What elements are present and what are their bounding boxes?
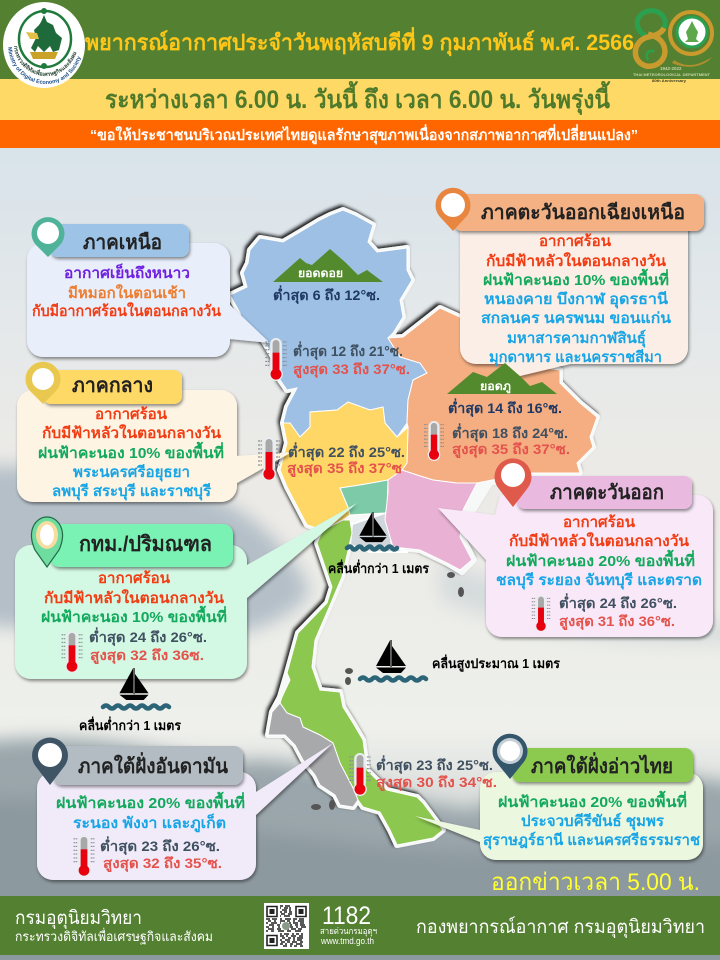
advisory band: “ขอให้ประชาชนบริเวณประเทศไทยดูแลรักษาสุขภาพเนื่องจากสภาพอากาศที่เปลี่ยนแปลง” — [90, 124, 638, 145]
forecast text: มุกดาหาร และนครราชสีมา — [489, 349, 662, 367]
logo: 80th anniversary — [633, 11, 712, 83]
forecast text: ฝนฟ้าคะนอง 10% ของพื้นที่ — [41, 605, 227, 626]
subtitle band — [0, 79, 720, 120]
mountain: doi peak with temperature: ยอดดอย — [298, 268, 343, 280]
south temperature: สูงสุด 30 ถึง 34°ซ. — [376, 774, 497, 791]
footer: hotline: 1182 — [322, 902, 371, 930]
digit 0 — [670, 12, 712, 54]
north temperature: สูงสุด 33 ถึง 37°ซ. — [293, 361, 410, 378]
pin — [492, 734, 528, 779]
central temperature: ต่ำสุด 22 ถึง 25°ซ. — [288, 442, 405, 461]
map: southern gulf coast — [280, 520, 443, 845]
mountain: phu peak with temperature: ยอดภู — [480, 381, 511, 394]
footer: hotline: สายด่วนกรมอุตุฯ — [320, 926, 377, 937]
header pill — [453, 194, 704, 231]
forecast text: มีหมอกในตอนเช้า — [68, 284, 186, 302]
heading: กทม./ปริมณฑล — [79, 533, 212, 556]
icon: thermometer — [424, 421, 444, 461]
forecast text: กับมีฟ้าหลัวในตอนกลางวัน — [44, 589, 225, 607]
footer: hotline: www.tmd.go.th — [320, 936, 374, 946]
forecast text: กับมีอากาศร้อนในตอนกลางวัน — [32, 302, 222, 320]
forecast text: ระนอง พังงา และภูเก็ต — [73, 813, 226, 833]
forecast text: อากาศร้อน — [539, 233, 612, 250]
callout body — [415, 772, 703, 860]
callout body — [17, 390, 292, 502]
temperature: ต่ำสุด 23 ถึง 26°ซ. — [100, 836, 220, 855]
forecast text — [481, 233, 672, 367]
forecast text: ฝนฟ้าคะนอง 20% ของพื้นที่ — [506, 549, 695, 570]
forecast text — [41, 570, 227, 626]
forecast text: อากาศร้อน — [95, 406, 168, 423]
temperature: สูงสุด 31 ถึง 36°ซ. — [559, 613, 675, 630]
callout body — [15, 503, 357, 679]
panel: east — [438, 458, 713, 637]
map: central region — [280, 402, 408, 530]
icon: boat, andaman upper: คลื่นต่ำกว่า 1 เมตร — [79, 716, 181, 733]
temperature: ต่ำสุด 24 ถึง 26°ซ. — [89, 627, 207, 646]
central temperature: สูงสุด 35 ถึง 37°ซ — [287, 460, 403, 477]
mountain: phu peak with temperature — [447, 363, 562, 417]
south temperature — [349, 753, 497, 796]
temperature — [532, 593, 677, 632]
forecast text: ประจวบคีรีขันธ์ ชุมพร — [521, 812, 665, 831]
forecast text: ลพบุรี สระบุรี และราชบุรี — [52, 483, 212, 501]
mountain: phu peak with temperature: ต่ำสุด 14 ถึง 16°ซ. — [448, 398, 562, 417]
temperature: สูงสุด 32 ถึง 36ซ. — [90, 647, 204, 664]
logo: 80th anniversary: 80th Anniversary — [652, 78, 687, 83]
pin — [32, 517, 62, 567]
forecast text: ฝนฟ้าคะนอง 10% ของพื้นที่ — [483, 268, 669, 289]
logo: 80th anniversary: THAI METEOROLOGICAL DEPARTMENT — [633, 72, 711, 77]
panel: bangkok and vicinity — [15, 503, 357, 679]
temperature: ต่ำสุด 24 ถึง 26°ซ. — [559, 593, 677, 612]
pin — [436, 188, 471, 231]
icon: boat, andaman upper — [79, 668, 181, 733]
north temperature: ต่ำสุด 12 ถึง 21°ซ. — [293, 341, 403, 360]
forecast text: ฝนฟ้าคะนอง 20% ของพื้นที่ — [498, 790, 687, 811]
callout body — [37, 743, 333, 880]
icon: boat, lower gulf: คลื่นสูงประมาณ 1 เมตร — [432, 654, 560, 672]
panel: south andaman — [32, 738, 333, 880]
header band — [0, 0, 720, 79]
forecast text: กับมีฟ้าหลัวในตอนกลางวัน — [509, 532, 690, 550]
header pill — [50, 524, 233, 567]
forecast text: อากาศเย็นถึงหนาว — [64, 263, 190, 282]
pin — [494, 458, 532, 507]
footer: department name: กรมอุตุนิยมวิทยา — [15, 908, 142, 930]
heading: ภาคเหนือ — [83, 231, 162, 254]
heading: ภาคตะวันออกเฉียงเหนือ — [481, 201, 685, 224]
icon: boat, upper gulf: คลื่นต่ำกว่า 1 เมตร — [328, 559, 429, 576]
panel: north-east — [436, 188, 704, 376]
forecast text — [496, 514, 702, 590]
map: Bangkok and vicinity — [340, 480, 389, 515]
forecast text: ชลบุรี ระยอง จันทบุรี และตราด — [496, 572, 702, 590]
south temperature: ต่ำสุด 23 ถึง 25°ซ. — [376, 755, 493, 774]
footer: hotline — [320, 902, 377, 946]
forecast text — [38, 406, 224, 501]
footer: division name: กองพยากรณ์อากาศ กรมอุตุนิยมวิทยา — [416, 916, 705, 939]
forecast text — [483, 790, 700, 850]
central temperature — [258, 437, 405, 481]
forecast text: กับมีฟ้าหลัวในตอนกลางวัน — [486, 252, 667, 270]
mountain: doi peak with temperature — [273, 249, 383, 304]
map of Thailand — [230, 210, 597, 845]
forecast text — [56, 791, 245, 833]
forecast text: สุราษฎร์ธานี และนครศรีธรรมราช — [483, 831, 700, 850]
logo: ministry seal: Ministry of Digital Economy and Society — [8, 47, 81, 84]
callout body — [460, 225, 688, 376]
north-east temperature: ต่ำสุด 18 ถึง 24°ซ. — [452, 423, 568, 442]
temperature — [74, 835, 222, 877]
issue time: ออกข่าวเวลา 5.00 น. — [491, 869, 700, 896]
forecast text: หนองคาย บึงกาฬ อุดรธานี — [484, 290, 669, 309]
map: northern region — [230, 210, 427, 437]
map: outer white halo — [230, 210, 597, 845]
map: small islands — [311, 572, 464, 810]
icon: boat, upper gulf — [328, 512, 429, 576]
forecast text: สกลนคร นครพนม ขอนแก่น — [481, 310, 672, 327]
footer: QR code — [264, 903, 309, 949]
logo: ministry seal: กระทรวงดิจิทัลเพื่อเศรษฐกิจและสังคม — [14, 46, 76, 76]
icon: thermometer — [349, 753, 371, 796]
temperature: สูงสุด 32 ถึง 35°ซ. — [103, 855, 222, 872]
north temperature — [265, 338, 410, 381]
forecast text: มหาสารคามกาฬสินธุ์ — [507, 329, 646, 348]
map: southern andaman coast — [268, 703, 358, 807]
map: north-eastern region — [388, 308, 597, 483]
icon: boat, lower gulf — [360, 640, 560, 680]
heading: ภาคใต้ฝั่งอันดามัน — [78, 751, 228, 778]
advisory band — [0, 120, 720, 148]
map: eastern region — [385, 470, 477, 570]
panel: south gulf — [415, 734, 703, 860]
forecast text: อากาศร้อน — [563, 514, 636, 531]
forecast text: ฝนฟ้าคะนอง 20% ของพื้นที่ — [56, 791, 245, 812]
panel: central — [17, 362, 292, 502]
logo: ministry seal — [3, 2, 85, 88]
footer: department name: กระทรวงดิจิทัลเพื่อเศรษฐกิจและสังคม — [15, 928, 213, 945]
mountain: doi peak with temperature: ต่ำสุด 6 ถึง 12°ซ. — [273, 285, 380, 304]
pin — [25, 362, 60, 404]
forecast text: ฝนฟ้าคะนอง 10% ของพื้นที่ — [38, 441, 224, 462]
header pill — [50, 224, 189, 257]
header pill — [43, 370, 182, 404]
icon: thermometer — [265, 338, 287, 381]
pin — [32, 738, 68, 785]
forecast text: กับมีฟ้าหลัวในตอนกลางวัน — [42, 424, 222, 442]
header pill — [517, 476, 692, 509]
callout body — [438, 495, 713, 637]
footer — [0, 896, 720, 955]
heading: ภาคใต้ฝั่งอ่าวไทย — [531, 751, 673, 778]
forecast text: อากาศร้อน — [98, 570, 171, 587]
forecast text — [32, 263, 222, 320]
heading: ภาคกลาง — [72, 375, 153, 397]
north-east temperature: สูงสุด 35 ถึง 37°ซ. — [452, 441, 570, 458]
icon: thermometer — [258, 437, 280, 481]
digit 8 — [637, 11, 665, 36]
map: upper gulf — [350, 512, 408, 552]
north-east temperature — [424, 421, 570, 461]
callout body — [27, 243, 270, 357]
logo: 80th anniversary: 1942-2022 — [660, 66, 682, 71]
forecast text: พระนครศรีอยุธยา — [73, 464, 190, 482]
panel: north — [27, 217, 270, 357]
footer: department name — [15, 908, 213, 945]
pin — [32, 217, 65, 257]
header pill — [512, 748, 693, 782]
subtitle band: ระหว่างเวลา 6.00 น. วันนี้ ถึง เวลา 6.00 น. วันพรุ่งนี้ — [105, 80, 611, 116]
heading: ภาคตะวันออก — [550, 482, 664, 504]
title: พยากรณ์อากาศประจำวันพฤหัสบดีที่ 9 กุมภาพันธ์ พ.ศ. 2566 — [85, 26, 634, 57]
temperature — [62, 627, 207, 673]
header pill — [53, 746, 243, 785]
